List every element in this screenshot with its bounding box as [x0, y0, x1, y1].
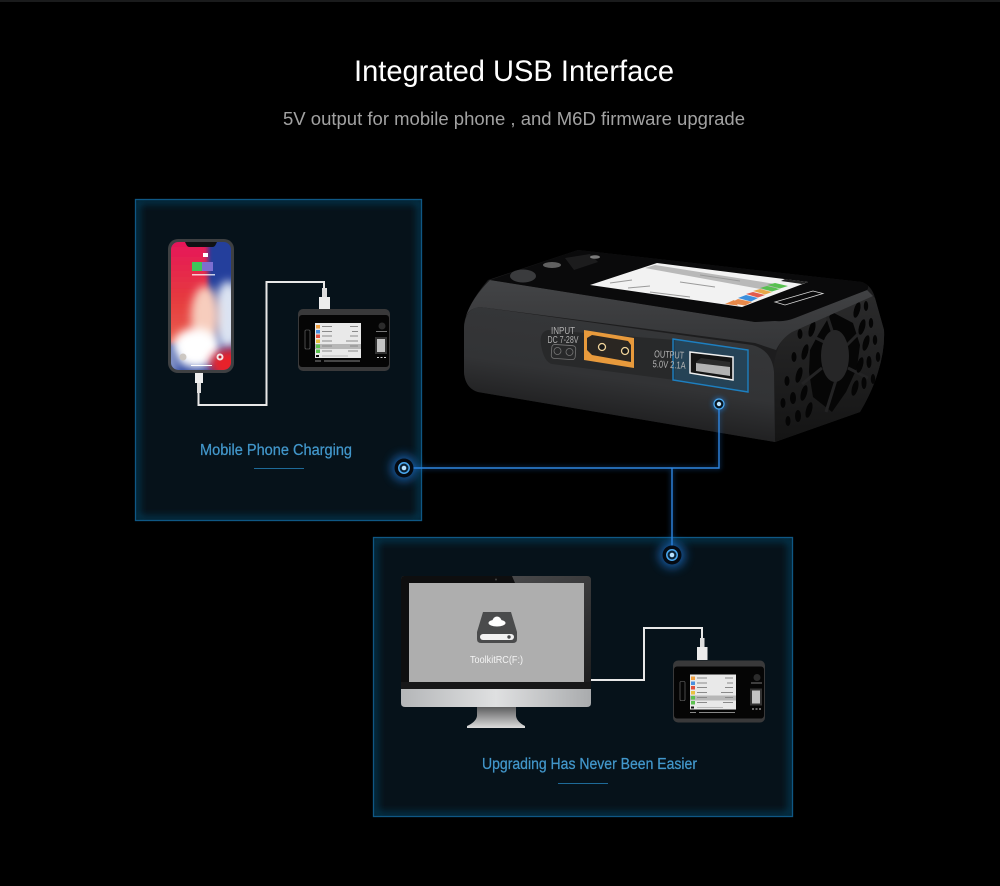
panel: mobile phone charging: [136, 200, 422, 520]
cable: phone to charger: [195, 282, 330, 405]
icon: smartphone: [168, 239, 234, 373]
side wall with fan grille: [773, 292, 884, 442]
output label: OUTPUT: [654, 349, 684, 362]
panel 2 background: [374, 538, 792, 816]
polarity badge: [551, 344, 576, 360]
power button: [510, 270, 536, 282]
node: upgrade panel: [659, 542, 685, 568]
cable: computer to charger: [591, 628, 708, 680]
label: mobile phone charging: Mobile Phone Charging: [200, 442, 352, 459]
USB port: [690, 352, 733, 380]
main charger device: [464, 250, 884, 442]
input label: INPUT: [551, 326, 575, 337]
front face: [464, 307, 775, 442]
input label: [548, 326, 579, 346]
upper chamfer band: [466, 280, 873, 350]
output label: 5.0V 2.1A: [652, 359, 686, 372]
subtitle: 5V output for mobile phone , and M6D firmware upgrade: [283, 109, 745, 129]
top black face: [490, 250, 868, 322]
node: phone panel: [391, 455, 417, 481]
drive name: ToolkitRC(F:): [470, 655, 523, 666]
line glow: [404, 404, 719, 555]
brand badge: [775, 291, 823, 305]
XT60 input port: [584, 330, 634, 368]
mini charger: [673, 660, 765, 722]
label underline: [254, 468, 304, 469]
icon: desktop monitor: [401, 576, 591, 728]
panel 1 background: [136, 200, 422, 520]
connector lines: [404, 404, 719, 555]
device screen: [590, 263, 808, 307]
dial and indicators: [543, 254, 600, 270]
line core: [404, 404, 719, 555]
output label: [652, 349, 686, 372]
mini charger: [298, 309, 390, 371]
USB highlight: [673, 339, 748, 392]
input label recess: [541, 330, 675, 380]
icon: cloud drive: [477, 612, 517, 643]
screen status strip: [781, 279, 808, 284]
panel: firmware upgrade: [374, 538, 792, 816]
node: USB port: [712, 397, 726, 411]
device body silhouette: [464, 250, 884, 442]
label underline: [558, 783, 608, 784]
input label: DC 7-28V: [548, 335, 579, 346]
label: upgrading: Upgrading Has Never Been Easier: [482, 756, 697, 773]
title: Integrated USB Interface: [354, 55, 674, 88]
